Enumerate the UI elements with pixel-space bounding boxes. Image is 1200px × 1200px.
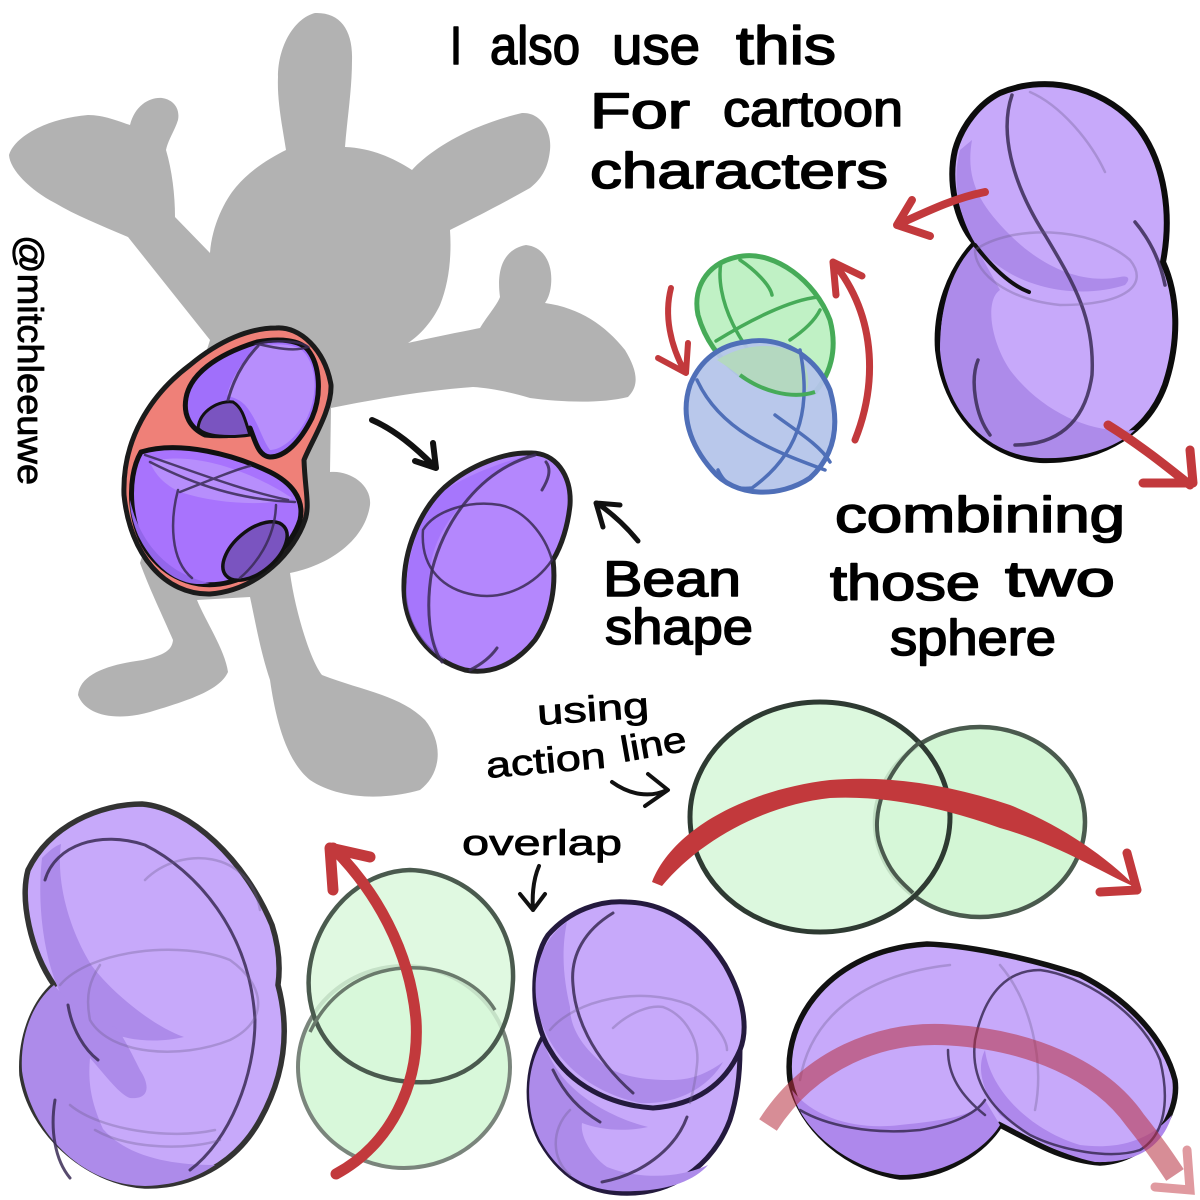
middle purple overlap bean	[529, 902, 744, 1193]
watermark handle: @mitchleeuwe	[10, 235, 51, 485]
lower ellipse	[529, 1037, 740, 1193]
upper inner sphere	[185, 340, 318, 457]
vertical green overlapping spheres	[298, 848, 513, 1174]
shading	[40, 844, 184, 1041]
green right circle	[875, 727, 1085, 917]
small purple bean shape	[404, 453, 570, 671]
text: I also use this: also	[490, 16, 580, 76]
text: overlap: overlap	[462, 822, 622, 863]
text: sphere: sphere	[890, 610, 1056, 666]
text: action: action	[484, 735, 607, 786]
red outer bean	[124, 328, 331, 594]
bottom-left large double bean	[22, 804, 284, 1186]
green and blue spheres with rotation arrows	[658, 256, 870, 492]
red arrow left	[897, 192, 985, 236]
text: I also use this: use	[612, 16, 700, 76]
upper shading	[536, 922, 723, 1103]
black arrow to bean	[372, 420, 436, 468]
top-right double bean	[897, 84, 1193, 485]
text: Bean: Bean	[603, 551, 741, 607]
lower inner sphere	[130, 448, 301, 592]
lower shading	[529, 1040, 708, 1191]
green overlapping spheres with action line	[652, 702, 1137, 932]
text: those two: two	[1005, 551, 1115, 607]
arrow: action line	[612, 774, 668, 806]
text: those two: those	[830, 555, 980, 611]
text: using: using	[536, 684, 650, 733]
text: I also use this: I	[450, 16, 462, 76]
text: shape: shape	[605, 599, 753, 655]
text: those two	[830, 551, 1115, 611]
red arrow down-right	[1108, 425, 1193, 485]
back sphere	[789, 944, 1176, 1177]
text: I also use this: this	[736, 16, 836, 76]
upper ellipse	[535, 902, 744, 1108]
red curved arrow up	[330, 848, 416, 1174]
small red arrow down	[658, 288, 688, 373]
text: combining: combining	[835, 487, 1125, 543]
text: line: line	[617, 718, 689, 770]
text: For cartoon	[590, 81, 903, 139]
faded red action line	[768, 1034, 1175, 1175]
large red arrow up	[833, 262, 870, 440]
purple bean with faded action line	[768, 944, 1190, 1190]
text: For cartoon: cartoon	[723, 81, 903, 137]
green left circle	[690, 702, 950, 932]
arrow to bean shape	[596, 503, 638, 541]
shading	[940, 140, 1135, 458]
text: For cartoon: For	[590, 83, 690, 139]
red action line arrow	[652, 779, 1137, 888]
bean cutaway diagram	[124, 328, 331, 594]
text: I also use this	[450, 16, 836, 76]
blue sphere	[686, 341, 835, 492]
arrow: overlap	[520, 866, 545, 910]
inner lines	[800, 970, 1165, 1154]
text: characters: characters	[590, 143, 888, 199]
green sphere	[697, 256, 833, 395]
shade lower	[792, 1050, 1172, 1175]
gray cartoon character silhouette	[9, 13, 636, 797]
